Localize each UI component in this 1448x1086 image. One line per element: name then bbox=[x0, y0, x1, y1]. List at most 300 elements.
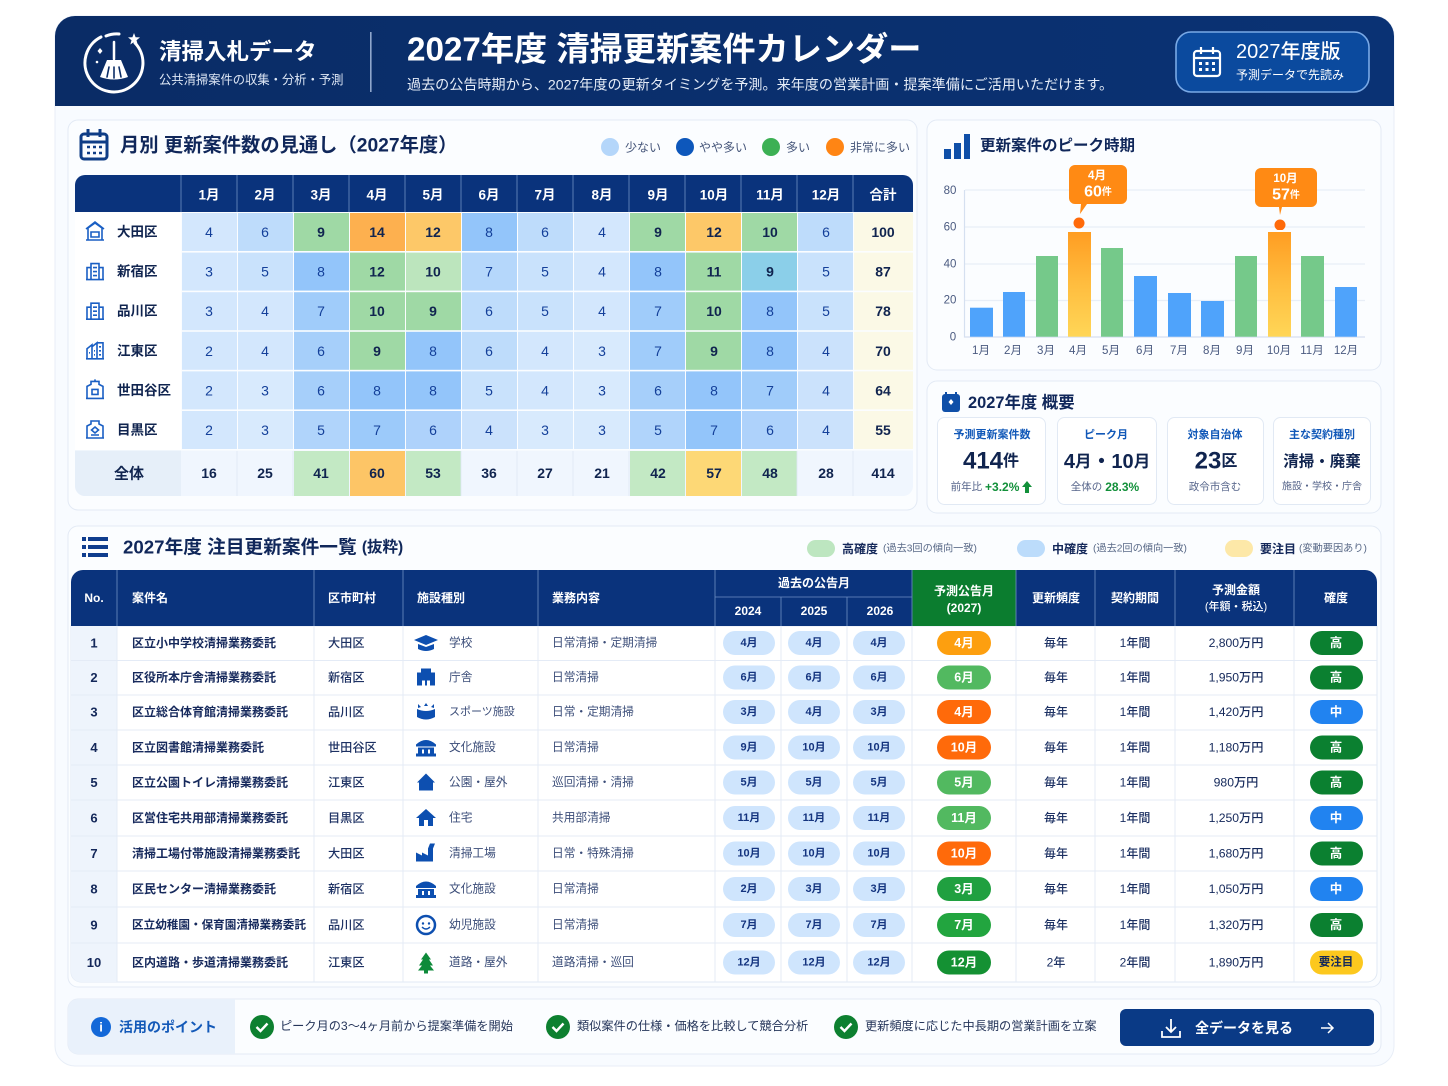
row: 全体 total: 36 bbox=[481, 465, 497, 481]
card: peak month: 4月・10月 bbox=[1064, 451, 1150, 473]
row: 大田区: 6 bbox=[261, 224, 269, 240]
row: 大田区: 4 bbox=[205, 224, 213, 240]
row 2: 6月 bbox=[740, 670, 758, 684]
row: 江東区: 7 bbox=[654, 343, 662, 359]
row: 目黒区: 4 bbox=[822, 422, 830, 438]
row: 全体 total bbox=[75, 450, 913, 496]
button: view all data bbox=[1120, 1009, 1374, 1046]
card: municipalities: 政令市含む bbox=[1189, 480, 1241, 493]
card: municipalities bbox=[1168, 418, 1264, 504]
row: 品川区 bbox=[86, 292, 913, 330]
row 8: 毎年 bbox=[1044, 881, 1068, 896]
bar chart: 0 bbox=[950, 332, 956, 344]
row 6: 共用部清掃 bbox=[552, 810, 611, 824]
row: 目黒区: 目黒区 bbox=[117, 422, 158, 438]
row 3: 品川区 bbox=[328, 705, 365, 719]
row 8: 3月 bbox=[805, 882, 823, 895]
row: 大田区: 6 bbox=[541, 224, 549, 240]
table header: (2027) bbox=[947, 601, 981, 615]
row: 世田谷区: 4 bbox=[541, 382, 549, 398]
bar chart: 60 bbox=[944, 222, 956, 234]
row 9: 高 bbox=[1330, 917, 1342, 932]
row: 世田谷区: 3 bbox=[261, 382, 269, 398]
panel: notable cases list bbox=[68, 526, 1381, 987]
row: 世田谷区: 3 bbox=[598, 382, 606, 398]
icon: bar chart bbox=[944, 134, 970, 159]
row: 大田区: 大田区 bbox=[117, 224, 158, 240]
heatmap table bbox=[75, 175, 913, 496]
row: 全体 total: 21 bbox=[594, 465, 610, 481]
bar chart: 10月 bbox=[1267, 345, 1291, 357]
table header: 2月 bbox=[254, 188, 276, 202]
row: 品川区: 5 bbox=[541, 303, 549, 319]
row: 品川区: 7 bbox=[654, 303, 662, 319]
row: 品川区: 品川区 bbox=[117, 304, 158, 319]
row: 江東区: 6 bbox=[485, 343, 493, 359]
row 2: 6月 bbox=[954, 670, 974, 684]
row 4: 世田谷区 bbox=[328, 740, 377, 754]
icon: calendar bbox=[81, 129, 107, 159]
panel: usage tips bbox=[68, 999, 1381, 1054]
heading: 2027年度 注目更新案件一覧 (抜粋) bbox=[123, 536, 403, 558]
row 5: 980万円 bbox=[1214, 776, 1258, 790]
row 6: 6 bbox=[90, 810, 98, 826]
row: 新宿区 bbox=[86, 253, 913, 291]
bar chart: 7月 bbox=[1170, 345, 1188, 357]
row: 目黒区: 2 bbox=[205, 422, 213, 438]
table header: 合計 bbox=[870, 188, 897, 202]
table header: 予測公告月 bbox=[934, 583, 994, 598]
row 3 bbox=[90, 700, 1363, 724]
row: 大田区: 12 bbox=[706, 224, 722, 240]
row 4: 文化施設 bbox=[449, 740, 496, 754]
table header: 12月 bbox=[812, 188, 840, 202]
row: 新宿区: 7 bbox=[485, 264, 493, 280]
row 1 bbox=[90, 631, 1363, 655]
row 1: 毎年 bbox=[1044, 635, 1068, 650]
row: 大田区: 12 bbox=[425, 224, 441, 240]
row 7: 10月 bbox=[867, 846, 891, 860]
table header: No. bbox=[84, 591, 104, 605]
row 9: 7月 bbox=[805, 918, 823, 931]
row: 新宿区: 87 bbox=[875, 264, 891, 280]
row: 大田区: 100 bbox=[871, 224, 895, 240]
icon: info: i bbox=[99, 1020, 103, 1034]
row 5: 1年間 bbox=[1120, 776, 1150, 790]
bar chart: 40 bbox=[944, 258, 956, 270]
row: 大田区: 9 bbox=[317, 224, 325, 240]
row: 全体 total: 42 bbox=[650, 465, 666, 481]
cases table bbox=[71, 570, 1377, 982]
row 1: 日常清掃・定期清掃 bbox=[552, 636, 658, 650]
row 1: 区立小中学校清掃業務委託 bbox=[132, 635, 276, 650]
tip 3: 更新頻度に応じた中長期の営業計画を立案 bbox=[865, 1018, 1097, 1033]
table header: 1月 bbox=[198, 188, 220, 202]
row 10: 江東区 bbox=[328, 954, 365, 970]
row: 江東区: 4 bbox=[822, 343, 830, 359]
callout: October peak: 57件 bbox=[1272, 186, 1300, 204]
legend: 多い bbox=[786, 140, 810, 154]
callout: April peak bbox=[1069, 165, 1127, 232]
tip 2 bbox=[546, 1015, 808, 1039]
row: 品川区: 8 bbox=[766, 303, 774, 319]
row 5: 毎年 bbox=[1044, 774, 1068, 790]
row: 目黒区: 7 bbox=[373, 422, 381, 438]
row 10: 12月 bbox=[802, 956, 826, 968]
legend: confidence: (過去2回の傾向一致) bbox=[1093, 542, 1187, 554]
callout: April peak: 4月 bbox=[1088, 169, 1106, 182]
table header: 確度 bbox=[1324, 590, 1348, 605]
row 4 bbox=[90, 736, 1363, 760]
row 4: 毎年 bbox=[1044, 740, 1068, 754]
row: 品川区: 4 bbox=[598, 303, 606, 319]
table header: 6月 bbox=[478, 188, 500, 202]
row: 全体 total: 57 bbox=[706, 465, 722, 481]
row: 世田谷区: 64 bbox=[875, 382, 891, 398]
bar chart bbox=[944, 165, 1365, 357]
row: 全体 total: 全体 bbox=[114, 464, 144, 482]
legend: confidence: (変動要因あり) bbox=[1299, 542, 1367, 554]
row 8: 3月 bbox=[870, 882, 888, 895]
row 2: 日常清掃 bbox=[552, 670, 599, 684]
row 9: 7月 bbox=[740, 918, 758, 931]
legend: 少ない bbox=[625, 140, 661, 154]
row 1: 大田区 bbox=[328, 636, 365, 650]
row: 江東区 bbox=[86, 332, 913, 370]
row: 品川区: 10 bbox=[706, 303, 722, 319]
row 9: 日常清掃 bbox=[552, 918, 599, 932]
row 1: 学校 bbox=[449, 636, 473, 650]
row 3: 3月 bbox=[740, 705, 758, 718]
row: 大田区: 14 bbox=[369, 224, 385, 240]
row: 江東区: 70 bbox=[875, 343, 891, 359]
row 9: 7月 bbox=[870, 918, 888, 931]
row: 全体 total: 60 bbox=[369, 465, 385, 481]
row 2: 1,950万円 bbox=[1209, 670, 1263, 684]
row: 目黒区: 4 bbox=[485, 422, 493, 438]
row 7: 10月 bbox=[951, 846, 977, 860]
row: 新宿区: 3 bbox=[205, 264, 213, 280]
callout: October peak bbox=[1255, 168, 1317, 232]
row 2: 高 bbox=[1330, 670, 1342, 684]
card: forecast total bbox=[938, 418, 1046, 504]
table header: 更新頻度 bbox=[1032, 590, 1080, 605]
heading: 2027年度 概要 bbox=[968, 393, 1075, 412]
row 8: 文化施設 bbox=[449, 882, 496, 896]
row 10: 道路清掃・巡回 bbox=[552, 955, 634, 969]
row 1: 4月 bbox=[954, 636, 974, 650]
row 6: 1,250万円 bbox=[1209, 811, 1263, 825]
row: 新宿区: 5 bbox=[541, 264, 549, 280]
row: 全体 total: 28 bbox=[818, 465, 834, 481]
row: 品川区: 5 bbox=[822, 303, 830, 319]
legend: やや多い bbox=[699, 140, 747, 154]
callout: April peak: 60件 bbox=[1084, 184, 1112, 200]
row: 目黒区: 3 bbox=[261, 422, 269, 438]
row 10 bbox=[87, 950, 1363, 974]
row: 品川区: 6 bbox=[485, 303, 493, 319]
row 9: 7月 bbox=[954, 918, 974, 932]
row 9: 品川区 bbox=[328, 918, 365, 932]
row 9: 1年間 bbox=[1120, 918, 1150, 932]
row 4: 1,180万円 bbox=[1209, 740, 1263, 754]
row 6: 中 bbox=[1330, 810, 1342, 825]
row 2: 2 bbox=[90, 670, 98, 685]
row: 江東区: 8 bbox=[429, 343, 437, 359]
row: 目黒区: 3 bbox=[541, 422, 549, 438]
row: 全体 total: 41 bbox=[313, 465, 329, 481]
row: 目黒区: 5 bbox=[654, 422, 662, 438]
row: 世田谷区 bbox=[86, 371, 913, 409]
bar chart: 3月 bbox=[1037, 345, 1055, 357]
row: 江東区: 3 bbox=[598, 343, 606, 359]
bar chart: 11月 bbox=[1300, 345, 1324, 357]
table header: 施設種別 bbox=[417, 590, 465, 605]
row 4: 10月 bbox=[951, 740, 977, 754]
bar chart: 8月 bbox=[1203, 345, 1221, 357]
table header: (年額・税込) bbox=[1205, 599, 1267, 613]
row 4: 9月 bbox=[740, 740, 758, 754]
table header: 案件名 bbox=[132, 590, 168, 605]
row: 世田谷区: 世田谷区 bbox=[117, 383, 171, 398]
card: contract types: 施設・学校・庁舎 bbox=[1282, 480, 1362, 492]
row: 世田谷区: 2 bbox=[205, 382, 213, 398]
row: 江東区: 4 bbox=[261, 343, 269, 359]
row 8: 中 bbox=[1330, 881, 1342, 896]
row 10: 10 bbox=[87, 955, 101, 970]
row: 大田区: 6 bbox=[822, 224, 830, 240]
table header: 2024 bbox=[735, 604, 762, 618]
row 9: 毎年 bbox=[1044, 917, 1068, 932]
row 10: 要注目 bbox=[1319, 954, 1353, 968]
row 9: 幼児施設 bbox=[449, 918, 496, 932]
row: 新宿区: 12 bbox=[369, 264, 385, 280]
row 8: 日常清掃 bbox=[552, 882, 599, 896]
row 8: 3月 bbox=[954, 882, 974, 896]
row: 大田区: 8 bbox=[485, 224, 493, 240]
card: municipalities: 23区 bbox=[1195, 448, 1237, 474]
row: 品川区: 7 bbox=[317, 303, 325, 319]
table header: 3月 bbox=[310, 188, 332, 202]
row 10: 12月 bbox=[951, 956, 977, 970]
row 7: 清掃工場付帯施設清掃業務委託 bbox=[132, 846, 300, 860]
bar chart: 12月 bbox=[1334, 345, 1358, 357]
header banner bbox=[55, 16, 1394, 106]
row 9: 1,320万円 bbox=[1209, 918, 1263, 932]
row: 江東区: 6 bbox=[317, 343, 325, 359]
icon: broom logo bbox=[85, 33, 143, 92]
table header: 2025 bbox=[801, 604, 828, 618]
row 7: 高 bbox=[1330, 846, 1342, 860]
row: 目黒区: 55 bbox=[875, 422, 891, 438]
row 10: 2年 bbox=[1047, 956, 1065, 970]
row: 目黒区: 6 bbox=[429, 422, 437, 438]
row 1: 1年間 bbox=[1120, 636, 1150, 650]
row 6: 区営住宅共用部清掃業務委託 bbox=[132, 810, 288, 825]
table header: 予測金額 bbox=[1212, 582, 1260, 597]
row 6: 11月 bbox=[868, 811, 890, 824]
brand name: 清掃入札データ bbox=[159, 38, 317, 64]
row: 江東区: 4 bbox=[541, 343, 549, 359]
legend bbox=[601, 138, 910, 156]
tip 3 bbox=[834, 1015, 1097, 1039]
row: 大田区 bbox=[86, 213, 913, 251]
panel: peak chart bbox=[927, 120, 1381, 370]
row 5: 5 bbox=[90, 775, 98, 790]
bar chart: 1月 bbox=[972, 345, 990, 357]
bar chart: 5月 bbox=[1102, 345, 1120, 357]
row: 江東区: 9 bbox=[710, 343, 718, 359]
panel: overview bbox=[927, 381, 1381, 513]
legend: 非常に多い bbox=[850, 140, 910, 154]
table header: 7月 bbox=[534, 188, 556, 202]
row 3: スポーツ施設 bbox=[449, 705, 515, 718]
bar chart: 4月 bbox=[1069, 345, 1087, 357]
row 5: 巡回清掃・清掃 bbox=[552, 775, 634, 789]
table header: 5月 bbox=[422, 188, 444, 202]
row 2: 6月 bbox=[870, 670, 888, 684]
row 7: 1,680万円 bbox=[1209, 846, 1263, 860]
heading: 更新案件のピーク時期 bbox=[980, 136, 1135, 154]
row 9 bbox=[90, 913, 1363, 937]
row 6: 11月 bbox=[951, 811, 977, 825]
bar chart: 20 bbox=[944, 294, 956, 306]
row 10: 1,890万円 bbox=[1209, 956, 1263, 970]
row 8 bbox=[90, 877, 1363, 901]
row: 大田区: 9 bbox=[654, 224, 662, 240]
row 2: 6月 bbox=[805, 670, 823, 684]
row 9: 区立幼稚園・保育園清掃業務委託 bbox=[132, 918, 306, 932]
row 6: 住宅 bbox=[449, 810, 472, 824]
table header: 区市町村 bbox=[328, 590, 376, 605]
row 2: 毎年 bbox=[1044, 670, 1068, 684]
row 4: 10月 bbox=[867, 740, 891, 754]
badge: 2027 edition bbox=[1176, 32, 1369, 92]
row 7: 清掃工場 bbox=[449, 846, 496, 860]
table header bbox=[71, 570, 1377, 626]
bar chart: 6月 bbox=[1136, 345, 1154, 357]
row: 世田谷区: 8 bbox=[373, 382, 381, 398]
row 3: 区立総合体育館清掃業務委託 bbox=[132, 704, 288, 719]
legend: confidence: 要注目 bbox=[1260, 541, 1296, 556]
row: 世田谷区: 6 bbox=[317, 382, 325, 398]
row 7: 10月 bbox=[737, 846, 761, 860]
card: contract types bbox=[1274, 418, 1370, 504]
row 7: 日常・特殊清掃 bbox=[552, 846, 634, 860]
badge: 2027 edition: 2027年度版 bbox=[1236, 40, 1340, 63]
row: 世田谷区: 8 bbox=[710, 382, 718, 398]
row: 全体 total: 414 bbox=[871, 465, 895, 481]
row 6 bbox=[90, 806, 1363, 830]
row 3: 毎年 bbox=[1044, 704, 1068, 719]
card: municipalities: 対象自治体 bbox=[1188, 427, 1242, 441]
card: forecast total: 前年比 +3.2% bbox=[951, 480, 1020, 494]
row 3: 中 bbox=[1330, 704, 1342, 719]
row 10: 2年間 bbox=[1120, 956, 1150, 970]
row 9: 9 bbox=[90, 918, 98, 932]
bar chart: 9月 bbox=[1236, 345, 1254, 357]
row: 江東区: 江東区 bbox=[117, 343, 158, 358]
row 8: 2月 bbox=[740, 882, 758, 895]
row: 世田谷区: 5 bbox=[485, 382, 493, 398]
tip 1 bbox=[250, 1015, 513, 1039]
icon: calendar badge bbox=[942, 392, 960, 412]
row: 全体 total: 53 bbox=[425, 465, 441, 481]
row 6: 目黒区 bbox=[328, 811, 365, 825]
row 1: 4月 bbox=[805, 636, 823, 649]
row 1: 1 bbox=[90, 636, 98, 650]
row: 新宿区: 8 bbox=[654, 264, 662, 280]
row 7: 7 bbox=[90, 846, 98, 861]
table header: 9月 bbox=[647, 188, 669, 202]
card: contract types: 清掃・廃棄 bbox=[1283, 452, 1361, 470]
row: 大田区: 4 bbox=[598, 224, 606, 240]
row 5: 公園・屋外 bbox=[449, 776, 508, 789]
table header: 契約期間 bbox=[1111, 590, 1159, 605]
row 4: 4 bbox=[90, 740, 98, 755]
card: contract types: 主な契約種別 bbox=[1289, 427, 1355, 441]
card: peak month: 全体の 28.3% bbox=[1071, 480, 1140, 494]
row 2: 1年間 bbox=[1120, 670, 1150, 684]
row 1: 2,800万円 bbox=[1209, 636, 1263, 650]
row 8: 新宿区 bbox=[328, 881, 365, 896]
row 3: 3月 bbox=[870, 705, 888, 718]
row: 目黒区: 7 bbox=[710, 422, 718, 438]
row: 新宿区: 9 bbox=[766, 264, 774, 280]
legend: confidence: 高確度 bbox=[842, 541, 878, 556]
row: 品川区: 78 bbox=[875, 303, 891, 319]
row: 目黒区 bbox=[86, 411, 913, 449]
row: 全体 total: 27 bbox=[537, 465, 553, 481]
row 7 bbox=[90, 842, 1363, 866]
row 2: 新宿区 bbox=[328, 670, 365, 684]
table header: 過去の公告月 bbox=[778, 575, 850, 590]
heading: 月別 更新案件数の見通し（2027年度） bbox=[120, 134, 457, 156]
row: 全体 total: 16 bbox=[201, 465, 217, 481]
row 8: 8 bbox=[90, 882, 98, 896]
row 3: 4月 bbox=[954, 705, 974, 719]
row 4: 10月 bbox=[802, 740, 826, 754]
row: 目黒区: 5 bbox=[317, 422, 325, 438]
table header: 10月 bbox=[700, 188, 728, 202]
row 5: 江東区 bbox=[328, 774, 365, 790]
row: 全体 total: 48 bbox=[762, 465, 778, 481]
tips heading: 活用のポイント bbox=[119, 1019, 217, 1035]
row: 江東区: 8 bbox=[766, 343, 774, 359]
table header: 2026 bbox=[867, 604, 894, 618]
card: peak month bbox=[1058, 418, 1156, 504]
row: 新宿区: 8 bbox=[317, 264, 325, 280]
table header bbox=[75, 175, 913, 212]
row 1: 4月 bbox=[870, 636, 888, 649]
legend: confidence bbox=[807, 540, 1367, 557]
row 3: 日常・定期清掃 bbox=[552, 704, 634, 718]
row 6: 1年間 bbox=[1120, 811, 1150, 825]
row 5: 5月 bbox=[805, 776, 823, 788]
row: 品川区: 9 bbox=[429, 303, 437, 319]
row: 新宿区: 5 bbox=[822, 264, 830, 280]
panel: monthly forecast heatmap bbox=[68, 120, 917, 510]
row: 目黒区: 3 bbox=[598, 422, 606, 438]
row 7: 大田区 bbox=[328, 846, 365, 860]
badge: 2027 edition: 予測データで先読み bbox=[1236, 67, 1344, 82]
row 10: 道路・屋外 bbox=[449, 955, 508, 969]
tip 1: ピーク月の3〜4ヶ月前から提案準備を開始 bbox=[280, 1018, 513, 1033]
title: 2027年度 清掃更新案件カレンダー bbox=[407, 30, 922, 68]
row: 新宿区: 11 bbox=[707, 264, 722, 280]
row 10: 区内道路・歩道清掃業務委託 bbox=[132, 954, 288, 970]
card: peak month: ピーク月 bbox=[1084, 428, 1128, 441]
